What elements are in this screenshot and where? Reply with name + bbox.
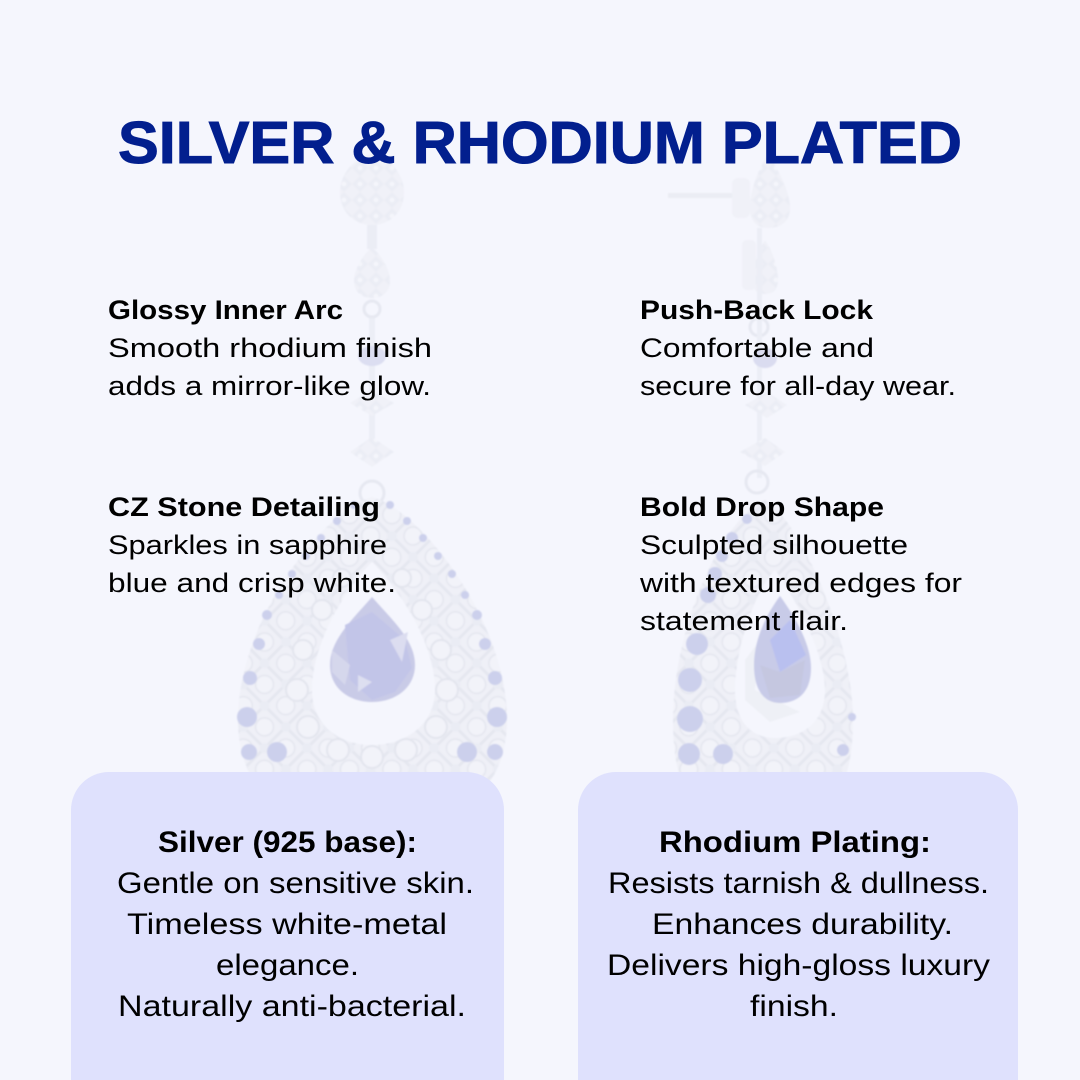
text block: CZ Stone Detailing <box>108 492 396 598</box>
title: SILVER & RHODIUM PLATED <box>118 110 962 176</box>
text block: Glossy Inner Arc: adds a mirror-like glow. <box>108 371 431 401</box>
text block: CZ Stone Detailing: Sparkles in sapphire <box>108 530 387 560</box>
panel text: silver benefits: Naturally anti-bacterial. <box>118 990 466 1023</box>
text block: Bold Drop Shape: statement flair. <box>640 606 848 636</box>
panel heading: silver: Silver (925 base): <box>158 826 417 859</box>
text block: Push-Back Lock: Push-Back Lock <box>640 295 874 325</box>
panel heading: rhodium: Rhodium Plating: <box>659 826 931 859</box>
panel: rhodium <box>578 772 1018 1080</box>
panel text: silver benefits: elegance. <box>216 949 359 982</box>
text block: CZ Stone Detailing: blue and crisp white. <box>108 568 396 598</box>
image: left earring, front view <box>237 154 507 800</box>
text block: Bold Drop Shape: Sculpted silhouette <box>640 530 908 560</box>
panel text: rhodium benefits: Delivers high-gloss luxury <box>607 949 990 982</box>
text block: Glossy Inner Arc: Smooth rhodium finish <box>108 333 432 363</box>
panel text: rhodium benefits: Enhances durability. <box>652 908 953 941</box>
panel text: silver benefits <box>117 867 474 1023</box>
text block: Bold Drop Shape: Bold Drop Shape <box>640 492 884 522</box>
text block: Glossy Inner Arc: Glossy Inner Arc <box>108 295 343 325</box>
panel text: rhodium benefits: finish. <box>750 990 838 1023</box>
text block: Bold Drop Shape <box>639 492 962 636</box>
image: right earring, side view <box>668 154 856 800</box>
panel text: silver benefits: Gentle on sensitive skin. <box>117 867 474 900</box>
panel text: rhodium benefits <box>607 867 990 1023</box>
panel: silver <box>71 772 504 1080</box>
panel text: rhodium benefits: Resists tarnish & dullness. <box>608 867 989 900</box>
text block: CZ Stone Detailing: CZ Stone Detailing <box>108 492 380 522</box>
panel text: silver benefits: Timeless white-metal <box>127 908 447 941</box>
text block: Push-Back Lock <box>640 295 956 401</box>
text block: Push-Back Lock: Comfortable and <box>640 333 874 363</box>
text block: Glossy Inner Arc <box>108 295 432 401</box>
text block: Push-Back Lock: secure for all-day wear. <box>640 371 956 401</box>
text block: Bold Drop Shape: with textured edges for <box>639 568 962 598</box>
